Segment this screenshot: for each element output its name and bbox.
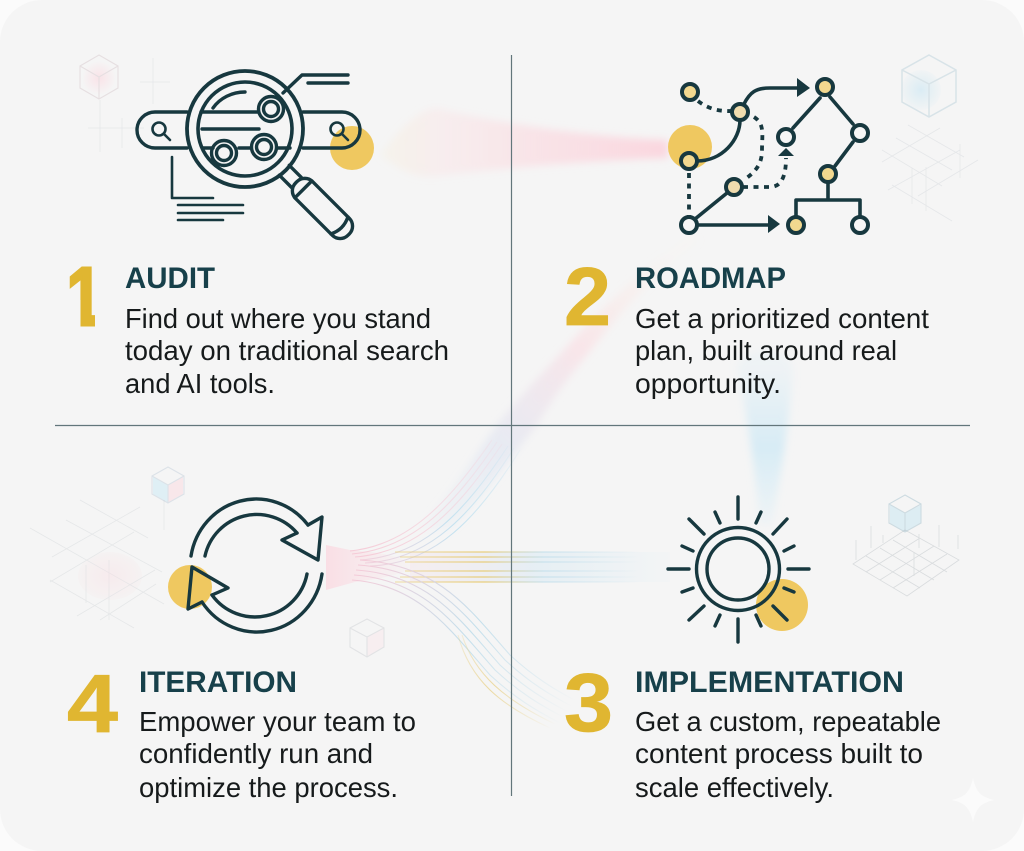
title: ROADMAP bbox=[635, 262, 786, 295]
heading block: step 1 bbox=[70, 266, 448, 394]
grid: lower right bbox=[853, 525, 959, 596]
description: plan, built around real bbox=[635, 335, 897, 366]
small search icon left bbox=[152, 122, 170, 140]
cube: top right blue bbox=[901, 55, 956, 117]
note lines bbox=[172, 157, 243, 220]
strands: across to implementation bbox=[395, 552, 640, 582]
lens bbox=[187, 71, 303, 187]
description: opportunity. bbox=[635, 368, 781, 399]
handle bbox=[276, 162, 357, 243]
vertical divider bbox=[510, 55, 512, 796]
dashed connectors bbox=[698, 101, 732, 111]
description bbox=[635, 303, 929, 399]
accent circle bbox=[756, 579, 808, 631]
accent circle bbox=[330, 126, 374, 170]
title: ITERATION bbox=[139, 666, 297, 699]
arrowheads bbox=[768, 78, 810, 233]
rays bbox=[668, 497, 809, 642]
rings bbox=[696, 528, 780, 610]
number 4: 4 bbox=[67, 657, 118, 750]
description: optimize the process. bbox=[139, 772, 398, 803]
ribbons connecting the steps bbox=[326, 108, 793, 728]
icon: magnifying glass audit bbox=[137, 71, 374, 243]
grid: top right bbox=[882, 125, 978, 221]
ribbon: roadmap to implementation bbox=[737, 350, 793, 525]
description: scale effectively. bbox=[635, 772, 834, 803]
heading block: step 4 bbox=[67, 657, 416, 803]
accent circle bbox=[668, 125, 712, 169]
search bar bbox=[137, 112, 360, 148]
description bbox=[139, 706, 416, 803]
sparkle bbox=[952, 778, 994, 822]
description bbox=[635, 706, 941, 803]
cube: lower right bbox=[889, 495, 921, 532]
heading block: step 2 bbox=[564, 250, 929, 399]
ribbon: iteration to roadmap bbox=[418, 235, 700, 530]
heading block: step 3 bbox=[564, 656, 941, 803]
accent circle bbox=[168, 565, 212, 609]
description: content process built to bbox=[635, 738, 923, 769]
grid: top left bbox=[88, 58, 170, 152]
description: Get a custom, repeatable bbox=[635, 706, 941, 737]
number 3: 3 bbox=[564, 656, 613, 749]
number 2: 2 bbox=[564, 250, 611, 343]
horizontal divider bbox=[55, 424, 970, 426]
strands: down to the lower right bbox=[352, 560, 580, 723]
description bbox=[125, 303, 449, 399]
cube: lower middle bbox=[350, 619, 384, 657]
strands: gold lower bbox=[458, 635, 555, 728]
number 1: 1 bbox=[66, 250, 102, 343]
pink glow: lower left bbox=[78, 552, 142, 600]
upper arrow bbox=[191, 499, 322, 560]
callout lines bbox=[283, 75, 348, 93]
description: confidently run and bbox=[139, 738, 373, 769]
description: and AI tools. bbox=[125, 368, 275, 399]
cube: top left pink bbox=[80, 55, 118, 99]
ribbon: audit to roadmap bbox=[380, 108, 668, 176]
description: today on traditional search bbox=[125, 335, 449, 366]
lens content bbox=[201, 112, 290, 148]
strands: up to roadmap bbox=[350, 440, 520, 566]
icon: circular arrows iteration bbox=[168, 499, 322, 632]
title: AUDIT bbox=[125, 262, 215, 295]
small search icon right bbox=[330, 122, 348, 140]
description: Empower your team to bbox=[139, 706, 416, 737]
nodes bbox=[681, 79, 868, 233]
ribbon: horizontal band bbox=[410, 552, 670, 582]
ribbon: iteration origin bbox=[326, 545, 420, 590]
icon: sun implementation bbox=[668, 497, 809, 642]
lower arrow bbox=[188, 567, 322, 632]
solid connectors bbox=[695, 88, 860, 225]
description: Find out where you stand bbox=[125, 303, 431, 334]
grid: lower left bbox=[30, 500, 164, 628]
icon: roadmap network bbox=[668, 78, 868, 233]
cube: lower left bbox=[152, 467, 184, 503]
title: IMPLEMENTATION bbox=[635, 666, 904, 699]
description: Get a prioritized content bbox=[635, 303, 929, 334]
